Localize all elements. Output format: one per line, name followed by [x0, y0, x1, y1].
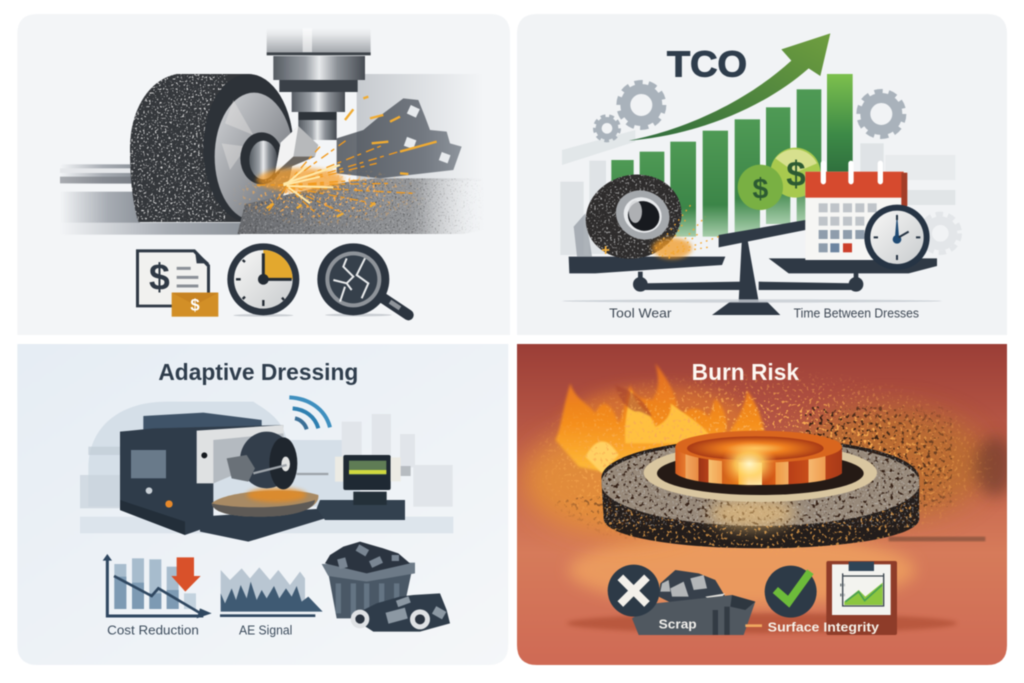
label: scrap: Scrap: [659, 617, 697, 632]
icon: x mark: [608, 565, 660, 617]
worn grinding wheel: [574, 173, 685, 260]
icon: coins: [738, 148, 820, 210]
grinding wheel: [127, 72, 318, 225]
flames: [555, 363, 765, 473]
panel: grinding wheel dressing cost: [17, 14, 510, 335]
scale beam and stand: [569, 220, 937, 315]
dressing head: [240, 432, 293, 488]
workpiece with grain: [237, 178, 473, 235]
icon: invoice with money: [136, 249, 218, 317]
label: tool wear: Tool Wear: [609, 307, 671, 321]
panel background: [17, 14, 510, 335]
panel background: [517, 14, 1007, 335]
icon: calendar: [805, 163, 907, 260]
chart: cost reduction: [103, 554, 212, 618]
icon: faded gear: [921, 214, 960, 253]
debris behind sparks: [337, 98, 462, 178]
icon: small gear: [595, 116, 619, 140]
faded background shapes: [560, 130, 955, 255]
panel background: [17, 344, 508, 665]
chart: AE signal: [220, 567, 323, 617]
icon: coins: $: [752, 173, 768, 205]
label: cost reduction: Cost Reduction: [107, 623, 199, 637]
shadow under icons: [567, 613, 957, 633]
panel: burn risk: [517, 344, 1015, 665]
label: AE signal: AE Signal: [239, 623, 292, 637]
heading: TCO: TCO: [667, 45, 747, 85]
heading: Adaptive Dressing: [158, 359, 358, 385]
scrap bin: [322, 542, 450, 632]
icon: clock with quarter highlighted: [227, 243, 299, 317]
label: surface integrity: Surface Integrity: [768, 620, 880, 635]
icon: invoice with money: $: [149, 255, 170, 297]
bar chart: [611, 74, 853, 237]
icon: large gear: [619, 83, 663, 127]
ground streak: [889, 537, 985, 541]
heading: Burn Risk: [692, 359, 799, 385]
grinding machine: [120, 413, 411, 542]
panel background: [517, 344, 1007, 665]
grinding wheel ring: [599, 431, 922, 550]
sparks: [233, 97, 440, 233]
icon: coins: $: [786, 155, 806, 194]
ground shadow: [562, 299, 942, 303]
warm glows: [522, 407, 1015, 607]
icon: invoice with money: $: [190, 296, 200, 315]
spindle: [267, 28, 371, 140]
connector: [745, 624, 762, 627]
icon: magnifier over cracked disc: [317, 243, 408, 316]
label: time between dresses: Time Between Dresses: [794, 307, 919, 321]
icon: scrap bin: [632, 570, 755, 635]
icon: clipboard chart: [826, 561, 897, 635]
sensor unit: [335, 457, 345, 482]
panel: TCO balance: [517, 14, 1007, 335]
icon: stopwatch clock: [864, 205, 930, 270]
machine background band: [357, 74, 483, 181]
ember particle cloud: [546, 374, 988, 540]
rails: [60, 164, 240, 235]
icon: wifi signal: [289, 397, 330, 429]
icon: check mark: [765, 566, 817, 618]
glowing hub: [675, 447, 842, 485]
diamond dresser tool: [275, 126, 318, 173]
rotary table: [200, 508, 325, 542]
panel: adaptive dressing: [17, 344, 508, 665]
sparks: [602, 203, 719, 259]
growth arrow: [629, 33, 830, 141]
icon: right gear: [859, 92, 903, 136]
faded factory background: [80, 402, 453, 533]
